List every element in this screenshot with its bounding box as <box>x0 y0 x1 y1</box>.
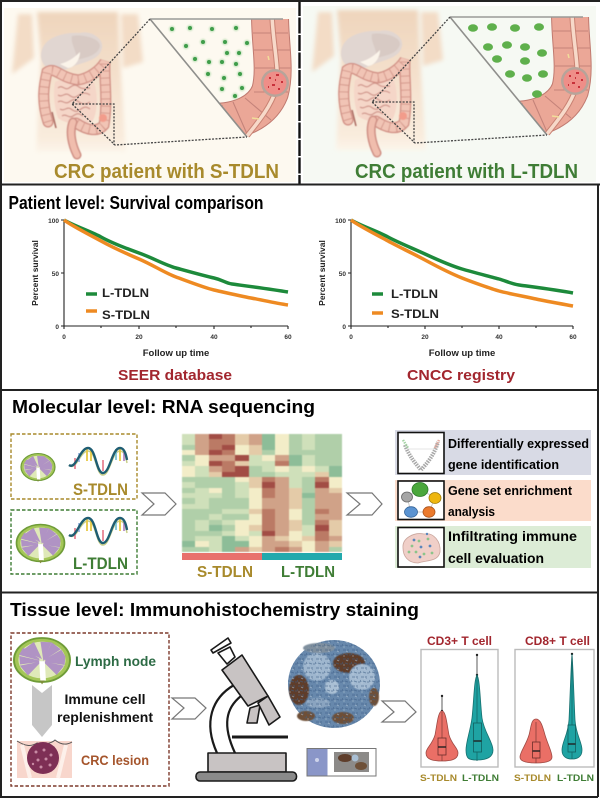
label: heatmap L-TDLN: L-TDLN <box>281 564 335 581</box>
analysis: immune infiltration: cell evaluation <box>448 550 544 566</box>
box: lymph node to CRC lesion <box>11 633 169 786</box>
label: CRC lesion: CRC lesion <box>81 753 149 768</box>
chart: SEER survival curves: 50 <box>52 271 59 278</box>
box: L-TDLN sample <box>11 510 137 574</box>
image: stained tissue thumbnail <box>307 748 376 776</box>
label: lymph node: Lymph node <box>75 653 156 669</box>
x labels: violin groups: S-TDLN <box>514 773 551 784</box>
title: CD8+ T cell: CD8+ T cell <box>525 634 590 648</box>
analysis: differential expression <box>395 430 591 475</box>
heading: tissue level: Tissue level: Immunohistochemistry staining <box>10 600 419 620</box>
analysis: gene set enrichment <box>395 480 591 521</box>
arrow: samples to heatmap <box>142 493 176 515</box>
analysis: differential expression: Differentially expressed <box>448 437 589 451</box>
x labels: violin groups <box>420 773 594 784</box>
chart: CNCC survival curves: 40 <box>495 334 503 341</box>
panel: L-TDLN patient <box>303 6 596 183</box>
chart: SEER survival curves: 100 <box>48 218 59 225</box>
large green lymph nodes <box>468 23 548 98</box>
violin plot: CD8+ T cell <box>515 650 594 767</box>
icon: CRC lesion <box>17 740 72 778</box>
small green lymph nodes <box>169 25 250 99</box>
chart: CNCC survival curves: 60 <box>569 334 577 341</box>
chart: CNCC survival curves: 0 <box>349 334 353 341</box>
chart: CNCC survival curves: Percent survival <box>317 240 327 306</box>
analysis: differential expression: gene identification <box>448 458 559 472</box>
icon: microscope <box>196 638 296 781</box>
x labels: violin groups: S-TDLN <box>420 773 457 784</box>
chart: CNCC survival curves: 100 <box>335 218 346 225</box>
label: CNCC registry: CNCC registry <box>407 367 516 384</box>
chart: CNCC survival curves: 0 <box>342 324 346 331</box>
arrow: immune cell migration <box>32 685 52 737</box>
violin plot: CD3+ T cell <box>421 650 498 767</box>
analysis: gene set enrichment: Gene set enrichment <box>448 484 573 498</box>
icon: lymph node <box>14 638 70 684</box>
panel: molecular level RNA sequencing <box>11 397 591 581</box>
chart: SEER survival curves: 40 <box>210 334 218 341</box>
arrow: tissue to violin plots <box>382 701 416 722</box>
panel: S-TDLN patient <box>4 8 296 183</box>
anatomy: torso with colon and zoomed L-TDLN tumour section <box>312 10 591 153</box>
chart: CNCC survival curves: S-TDLN <box>391 307 439 321</box>
label: immune cell replenishment: Immune cell <box>64 692 146 707</box>
chart: SEER survival curves: 0 <box>55 324 59 331</box>
anatomy: torso with colon and zoomed S-TDLN tumour section <box>12 12 291 155</box>
heading: CRC patient with S-TDLN: CRC patient with S-TDLN <box>54 161 279 183</box>
label: SEER database: SEER database <box>118 367 232 384</box>
chart: SEER survival curves: 60 <box>284 334 292 341</box>
box: S-TDLN sample <box>11 434 137 499</box>
analysis: immune infiltration: Infiltrating immune <box>448 528 577 544</box>
chart: CNCC survival curves: 50 <box>339 271 346 278</box>
arrow: heatmap to analyses <box>347 493 382 515</box>
x labels: violin groups: L-TDLN <box>557 773 594 784</box>
box: S-TDLN sample: S-TDLN <box>73 480 128 499</box>
chart: SEER survival curves: Percent survival <box>30 240 40 306</box>
heading: molecular level: Molecular level: RNA sequencing <box>12 397 315 417</box>
chart: SEER survival curves: 20 <box>135 334 143 341</box>
panel: patient level survival comparison <box>8 193 577 384</box>
analysis: immune infiltration <box>395 526 591 568</box>
chart: SEER survival curves: Follow up time <box>143 348 209 359</box>
arrow: lesion to microscope <box>172 698 206 719</box>
heatmap: gene expression <box>181 433 343 553</box>
heading: CRC patient with L-TDLN: CRC patient with L-TDLN <box>355 161 578 183</box>
heading: patient level: Patient level: Survival comparison <box>8 193 264 213</box>
analysis: gene set enrichment: analysis <box>448 505 495 519</box>
box: L-TDLN sample: L-TDLN <box>73 554 128 573</box>
chart: CNCC survival curves <box>317 218 577 359</box>
chart: SEER survival curves <box>30 218 292 359</box>
chart: CNCC survival curves: L-TDLN <box>391 287 438 301</box>
heatmap group bar <box>182 553 342 560</box>
chart: SEER survival curves: S-TDLN <box>102 308 150 322</box>
title: CD3+ T cell: CD3+ T cell <box>427 634 492 648</box>
image: IHC stained tissue <box>288 640 380 728</box>
box: lymph node to CRC lesion: replenishment <box>57 710 154 725</box>
chart: SEER survival curves: L-TDLN <box>102 286 149 300</box>
chart: SEER survival curves: 0 <box>62 334 66 341</box>
chart: CNCC survival curves: Follow up time <box>429 348 495 359</box>
chart: CNCC survival curves: 20 <box>421 334 429 341</box>
panel: tissue level immunohistochemistry <box>10 600 594 786</box>
x labels: violin groups: L-TDLN <box>462 773 499 784</box>
label: heatmap S-TDLN: S-TDLN <box>197 564 253 581</box>
